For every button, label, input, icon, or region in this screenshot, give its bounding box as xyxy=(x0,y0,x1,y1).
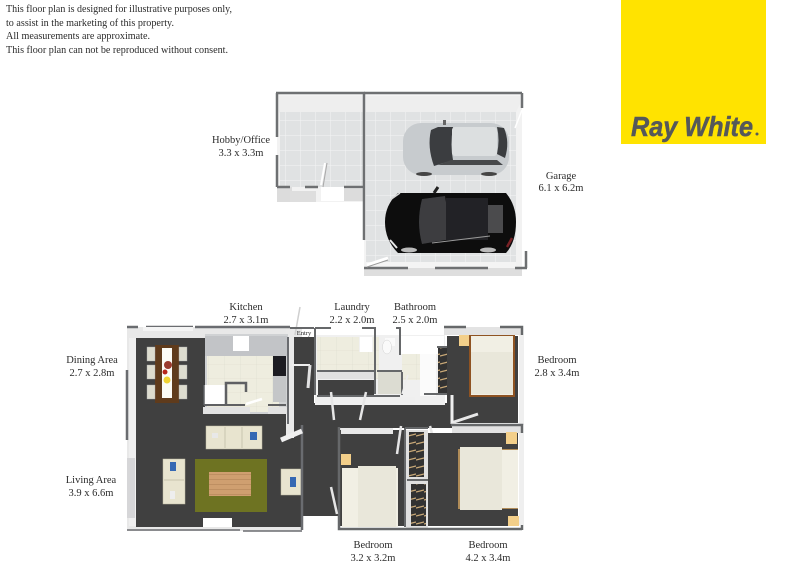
label: bedroom lower right: 4.2 x 3.4m xyxy=(466,553,510,564)
label: living area: Living Area xyxy=(66,475,117,486)
label: hobby/office: 3.3 x 3.3m xyxy=(219,148,263,159)
lower floor plan: house xyxy=(127,307,524,531)
rug and coffee table xyxy=(195,459,267,512)
label: laundry: 2.2 x 2.0m xyxy=(330,315,374,326)
label: dining area: Dining Area xyxy=(66,355,118,366)
logo: Ray White xyxy=(621,0,766,144)
house base and carpet xyxy=(127,327,452,531)
label: bathroom: 2.5 x 2.0m xyxy=(393,315,437,326)
label: bedroom top right xyxy=(535,355,579,379)
label: living area: 3.9 x 6.6m xyxy=(69,488,113,499)
label: dining area: 2.7 x 2.8m xyxy=(70,368,114,379)
disclaimer text: All measurements are approximate. xyxy=(6,31,150,42)
label: bedroom lower right xyxy=(466,540,510,564)
room labels xyxy=(66,135,583,564)
black car xyxy=(385,187,516,253)
label: bedroom lower left: 3.2 x 3.2m xyxy=(351,553,395,564)
sofa: upper xyxy=(206,426,262,449)
label: bedroom top right: Bedroom xyxy=(537,355,577,366)
label: garage xyxy=(539,171,583,194)
disclaimer text: This floor plan is designed for illustrative purposes only, xyxy=(6,4,232,15)
bedroom: lower right xyxy=(405,425,524,530)
laundry and bathroom xyxy=(315,328,445,420)
label: garage: 6.1 x 6.2m xyxy=(539,183,583,194)
label: kitchen xyxy=(224,302,268,326)
label: bedroom lower left: Bedroom xyxy=(353,540,393,551)
label: bedroom top right: 2.8 x 3.4m xyxy=(535,368,579,379)
logo: Ray White: Ray White xyxy=(631,111,753,142)
armchair xyxy=(281,469,301,495)
label: garage: Garage xyxy=(546,171,576,182)
label: kitchen: Kitchen xyxy=(229,302,263,313)
entry door xyxy=(290,307,314,388)
kitchen xyxy=(203,334,288,414)
label: dining area xyxy=(66,355,118,379)
label: laundry xyxy=(330,302,374,326)
disclaimer text xyxy=(6,4,232,56)
silver car xyxy=(403,120,509,176)
wardrobe: top xyxy=(424,347,456,394)
label: living area xyxy=(66,475,117,499)
bedroom: lower left xyxy=(331,426,406,529)
living area walls xyxy=(127,327,302,531)
bedroom: top right xyxy=(444,327,524,425)
garage xyxy=(364,93,527,276)
label: bathroom xyxy=(393,302,437,326)
label: bedroom lower left xyxy=(351,540,395,564)
wardrobes: centre xyxy=(405,426,447,528)
sofa: left xyxy=(163,459,185,504)
label: entry: Entry xyxy=(297,330,312,337)
label: kitchen: 2.7 x 3.1m xyxy=(224,315,268,326)
hobby room xyxy=(276,93,365,202)
label: hobby/office: Hobby/Office xyxy=(212,135,270,146)
label: hobby/office xyxy=(212,135,270,159)
disclaimer text: to assist in the marketing of this property. xyxy=(6,18,174,29)
label: laundry: Laundry xyxy=(334,302,371,313)
label: bedroom lower right: Bedroom xyxy=(468,540,508,551)
dining table xyxy=(147,345,187,403)
disclaimer text: This floor plan can not be reproduced without consent. xyxy=(6,45,228,56)
label: bathroom: Bathroom xyxy=(394,302,436,313)
upper floor plan: hobby room and garage xyxy=(276,93,527,276)
